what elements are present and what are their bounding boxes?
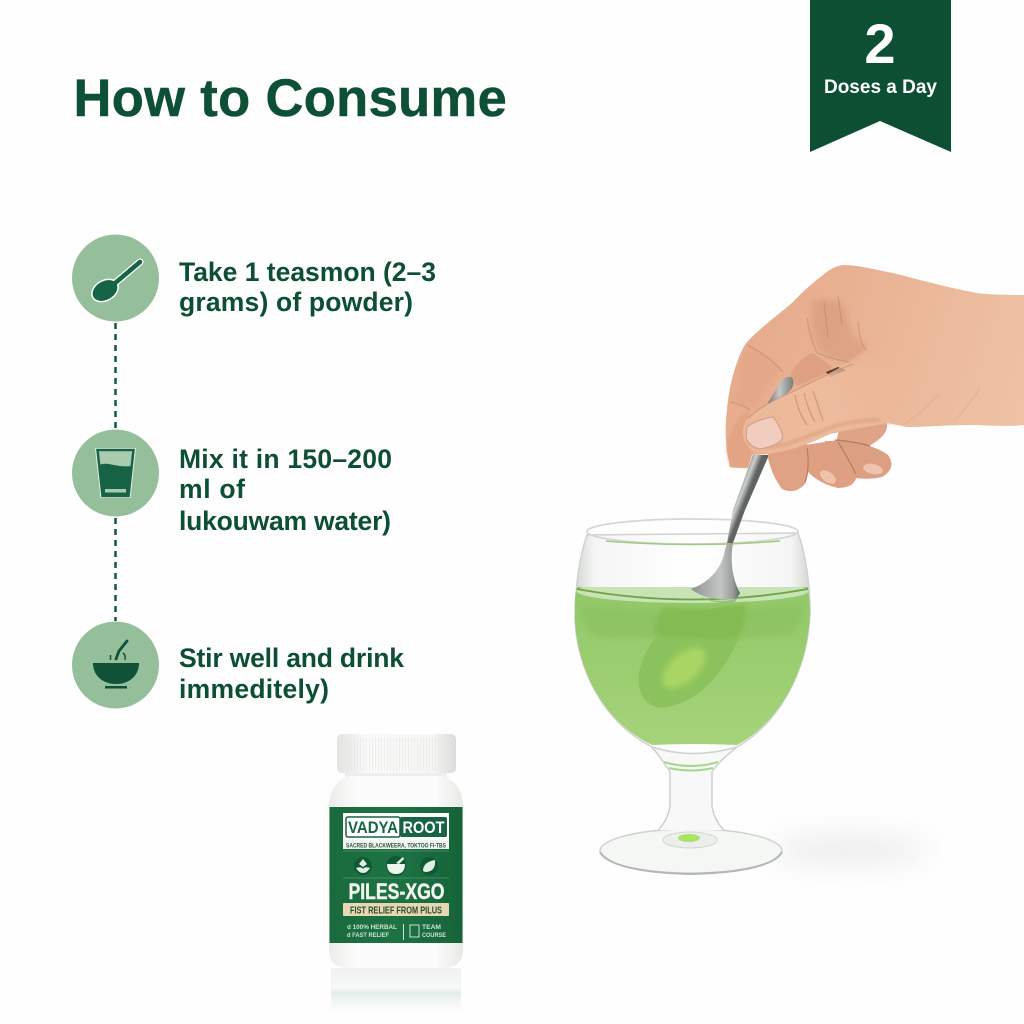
label footer: COURSE bbox=[422, 932, 447, 939]
glass rim bbox=[587, 519, 798, 544]
thumb nail bbox=[746, 417, 783, 449]
bottle label bbox=[330, 807, 462, 943]
glass bowl bbox=[575, 533, 810, 754]
step 3 text: Stir well and drink bbox=[179, 643, 404, 673]
ring finger bbox=[820, 441, 891, 479]
step 3 bbox=[72, 622, 404, 708]
middle finger in gap bbox=[790, 353, 832, 386]
refracted band bbox=[592, 624, 792, 634]
glass of green drink bbox=[574, 518, 811, 875]
middle nail bbox=[818, 468, 838, 486]
badge caption: Doses a Day bbox=[824, 77, 937, 98]
step 2 text: lukouwam water) bbox=[179, 506, 391, 536]
finger creases bbox=[805, 440, 870, 482]
hand bbox=[726, 265, 1024, 491]
cream band bbox=[343, 903, 449, 916]
step 2 text: Mix it in 150–200 bbox=[179, 444, 392, 474]
thumb lower shade bbox=[748, 420, 880, 447]
thumb knuckle lines bbox=[795, 391, 823, 425]
step 3 text: immeditely) bbox=[179, 674, 329, 704]
glass shadow bbox=[772, 836, 928, 864]
brand name: VADYA bbox=[348, 819, 398, 837]
middle finger bbox=[805, 440, 857, 488]
ring nail bbox=[862, 462, 884, 476]
thumb bbox=[743, 352, 911, 453]
product name: PILES-XGO bbox=[348, 879, 444, 904]
label footer: TEAM bbox=[422, 924, 441, 931]
step 2 text: ml of bbox=[179, 474, 245, 504]
product bottle bbox=[329, 734, 463, 1018]
step connector: dotted line one bbox=[114, 323, 117, 428]
thumb upper edge bbox=[748, 364, 853, 418]
step 2 bbox=[72, 430, 392, 536]
stirring spoon lower part bbox=[691, 455, 769, 603]
herbal icons bbox=[343, 851, 449, 878]
label footer: d FAST RELIEF bbox=[347, 932, 389, 939]
palm and index bbox=[726, 265, 1024, 468]
spoon handle grip bbox=[765, 377, 793, 408]
badge number: 2 bbox=[864, 12, 896, 75]
green liquid bbox=[574, 587, 810, 745]
tagline bbox=[343, 840, 449, 849]
wrist creases bbox=[905, 388, 980, 424]
glass foot bbox=[599, 828, 783, 874]
little finger bbox=[835, 423, 887, 448]
bottle cap bbox=[337, 734, 456, 773]
hand fold lines bbox=[730, 296, 866, 410]
glass stem bbox=[652, 747, 737, 830]
step connector: dotted line two bbox=[114, 518, 117, 621]
bottle neck bbox=[345, 770, 447, 782]
bottle reflection bbox=[331, 968, 461, 1018]
submerged spoon bbox=[639, 606, 745, 708]
liquid surface bbox=[576, 587, 808, 603]
brand plate bbox=[343, 813, 449, 840]
bottle label: ROOT bbox=[402, 819, 444, 837]
icon: spoon bbox=[72, 234, 159, 322]
title: How to Consume bbox=[74, 69, 507, 128]
bottle label: FIST RELIEF FROM PILUS bbox=[350, 906, 442, 916]
step 1 text bbox=[179, 257, 436, 317]
step 1 bbox=[72, 234, 436, 322]
spoon bowl above liquid bbox=[691, 543, 740, 599]
icon: glass of water bbox=[72, 430, 159, 516]
index lower finger bbox=[768, 444, 809, 491]
label footer bbox=[347, 924, 447, 940]
badge: doses a day bbox=[810, 0, 951, 152]
step 2 text bbox=[179, 444, 392, 536]
rim tint bbox=[606, 541, 780, 544]
glass foot centre with green reflection bbox=[663, 832, 717, 848]
bottle body bbox=[329, 776, 463, 968]
hand shadows bbox=[726, 299, 868, 468]
icon: bowl with spoon bbox=[72, 622, 159, 708]
spoon underwater shade bbox=[700, 597, 738, 603]
label footer: d 100% HERBAL bbox=[347, 924, 397, 931]
step 1 text: Take 1 teasmon (2–3 bbox=[179, 257, 436, 287]
step 1 text: grams) of powder) bbox=[179, 287, 413, 317]
dark gap bbox=[826, 367, 846, 377]
bottle label: SACRED BLACKWEERA, TOKTOO FI-TBS bbox=[346, 842, 447, 850]
step 3 text bbox=[179, 643, 404, 704]
